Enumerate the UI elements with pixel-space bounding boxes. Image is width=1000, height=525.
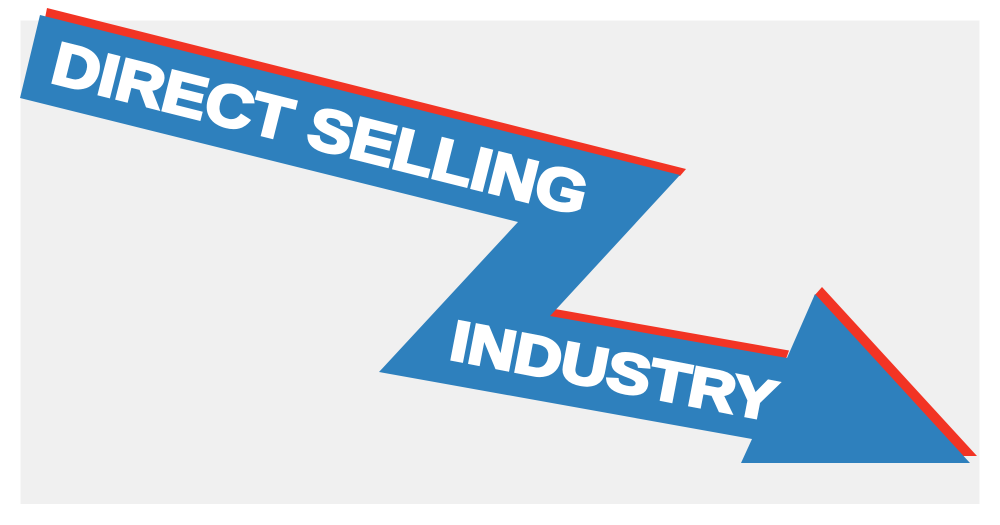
arrow: red shadow edge [45,8,977,456]
title line 1: DIRECT SELLING [46,30,594,228]
title line 2: INDUSTRY [446,308,782,433]
